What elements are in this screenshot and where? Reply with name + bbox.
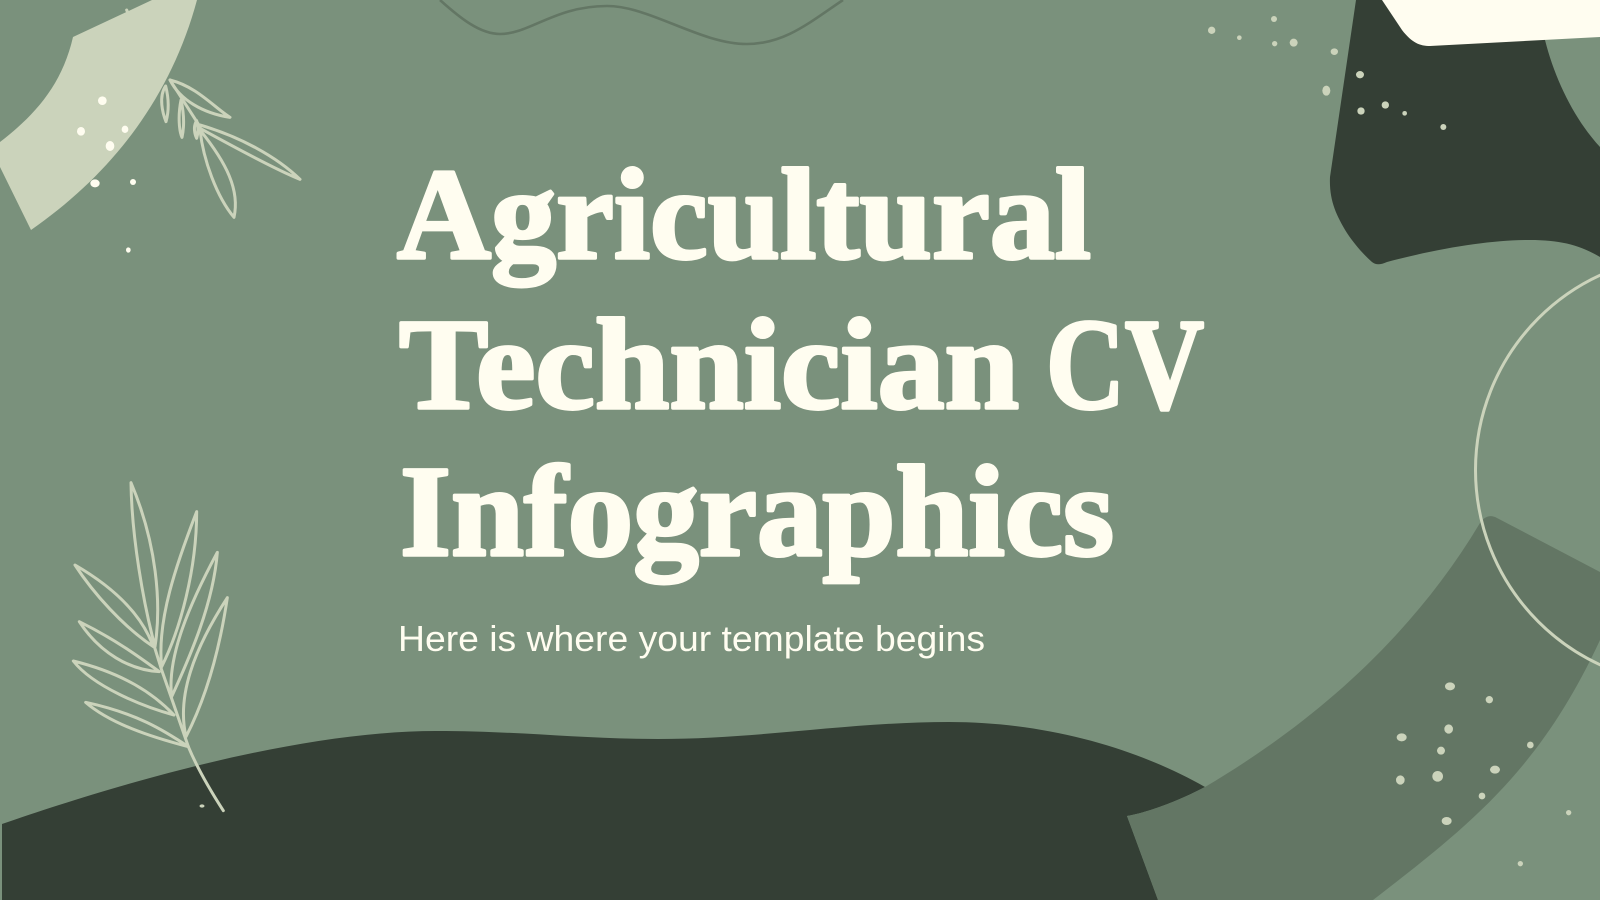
title: Technician xyxy=(399,293,1019,437)
bottom-right mid-green band xyxy=(1127,516,1600,900)
title: CV xyxy=(1046,293,1204,437)
top-left dots xyxy=(77,96,136,253)
top-right dots xyxy=(1208,16,1446,130)
large thin circle outline xyxy=(1476,256,1600,684)
top-right cream shape xyxy=(1382,0,1600,46)
subtitle: Here is where your template begins xyxy=(398,618,985,659)
title: Agricultural xyxy=(397,143,1091,287)
bottom dark wave xyxy=(2,722,1205,900)
left leaf branch xyxy=(73,483,227,811)
top-left pale shape xyxy=(0,0,197,230)
top-left leaf sprig xyxy=(127,10,300,217)
title: Infographics xyxy=(400,440,1114,584)
squiggle line at top xyxy=(440,0,843,44)
small dot near leaf stem xyxy=(200,804,204,808)
top-right dark shape xyxy=(1330,0,1600,264)
title xyxy=(397,143,1204,584)
bottom-right dots xyxy=(1396,682,1571,866)
